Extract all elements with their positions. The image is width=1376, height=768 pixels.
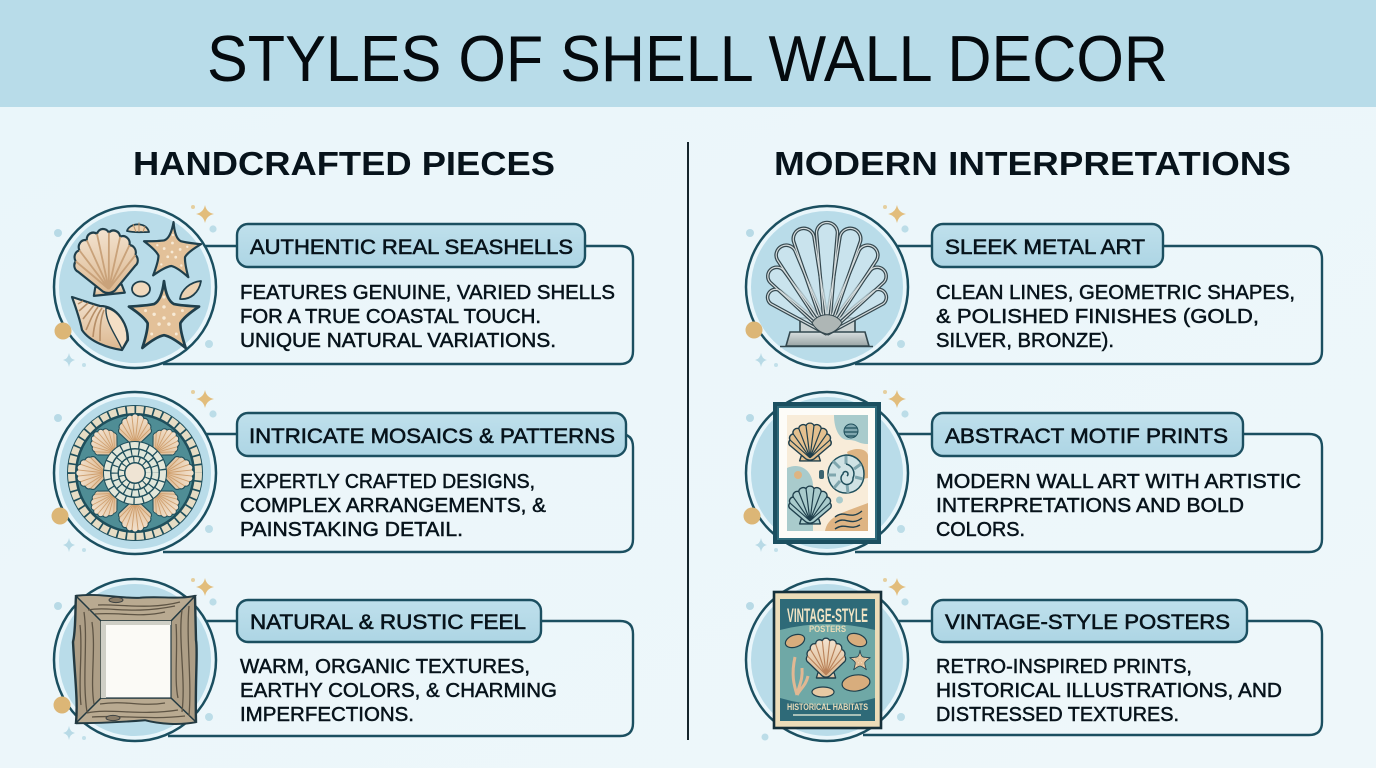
- icon: framed abstract print: [744, 390, 909, 554]
- description: [240, 656, 557, 726]
- description: & POLISHED FINISHES (GOLD,: [936, 306, 1259, 328]
- description: PAINSTAKING DETAIL.: [240, 519, 463, 541]
- label pill: [932, 600, 1247, 642]
- panel: authentic real seashells: [54, 205, 633, 368]
- label pill: AUTHENTIC REAL SEASHELLS: [250, 236, 573, 259]
- panel: vintage-style posters: [746, 578, 1322, 741]
- description: SILVER, BRONZE).: [936, 330, 1114, 352]
- description: WARM, ORGANIC TEXTURES,: [240, 656, 530, 678]
- icon: vintage poster: POSTERS: [809, 624, 846, 634]
- description: [936, 471, 1301, 541]
- header band: [0, 0, 1376, 107]
- icon: assorted seashells and starfish: [54, 205, 217, 368]
- description: MODERN WALL ART WITH ARTISTIC: [936, 471, 1301, 493]
- description: RETRO-INSPIRED PRINTS,: [936, 656, 1192, 678]
- description: [240, 471, 547, 541]
- description: EARTHY COLORS, & CHARMING: [240, 680, 557, 702]
- description: CLEAN LINES, GEOMETRIC SHAPES,: [936, 282, 1295, 304]
- panel: natural and rustic feel: [54, 578, 633, 741]
- label pill: [932, 413, 1243, 456]
- panel: intricate mosaics and patterns: [52, 390, 633, 554]
- heading: handcrafted pieces: HANDCRAFTED PIECES: [133, 145, 555, 182]
- description: IMPERFECTIONS.: [240, 704, 414, 726]
- panel: abstract motif prints: [744, 390, 1322, 554]
- description: [240, 282, 615, 352]
- description: DISTRESSED TEXTURES.: [936, 704, 1179, 726]
- description: COLORS.: [936, 519, 1025, 541]
- description: COMPLEX ARRANGEMENTS, &: [240, 495, 547, 517]
- description: FEATURES GENUINE, VARIED SHELLS: [240, 282, 615, 304]
- description: HISTORICAL ILLUSTRATIONS, AND: [936, 680, 1282, 702]
- description: INTERPRETATIONS AND BOLD: [936, 495, 1244, 517]
- label pill: ABSTRACT MOTIF PRINTS: [945, 425, 1228, 448]
- label pill: INTRICATE MOSAICS & PATTERNS: [249, 425, 615, 448]
- label pill: [932, 224, 1163, 267]
- label pill: VINTAGE-STYLE POSTERS: [945, 611, 1230, 634]
- panel: sleek metal art: [746, 205, 1322, 368]
- label pill: [237, 224, 585, 267]
- icon: vintage poster: [746, 578, 909, 741]
- description: [936, 282, 1295, 352]
- heading: modern interpretations: MODERN INTERPRETATIONS: [774, 145, 1291, 182]
- label pill: NATURAL & RUSTIC FEEL: [250, 611, 526, 634]
- icon: circular shell mosaic: [52, 390, 217, 554]
- label pill: SLEEK METAL ART: [945, 236, 1145, 259]
- description: FOR A TRUE COASTAL TOUCH.: [240, 306, 541, 328]
- icon: driftwood frame: [54, 578, 217, 741]
- icon: vintage poster: HISTORICAL HABITATS: [787, 702, 868, 712]
- title: STYLES OF SHELL WALL DECOR: [207, 22, 1168, 95]
- description: EXPERTLY CRAFTED DESIGNS,: [240, 471, 535, 493]
- label pill: [237, 413, 626, 456]
- description: UNIQUE NATURAL VARIATIONS.: [240, 330, 556, 352]
- icon: metal scallop sculpture: [746, 205, 909, 368]
- description: [936, 656, 1282, 726]
- label pill: [237, 600, 541, 642]
- icon: vintage poster: VINTAGE-STYLE: [787, 606, 868, 627]
